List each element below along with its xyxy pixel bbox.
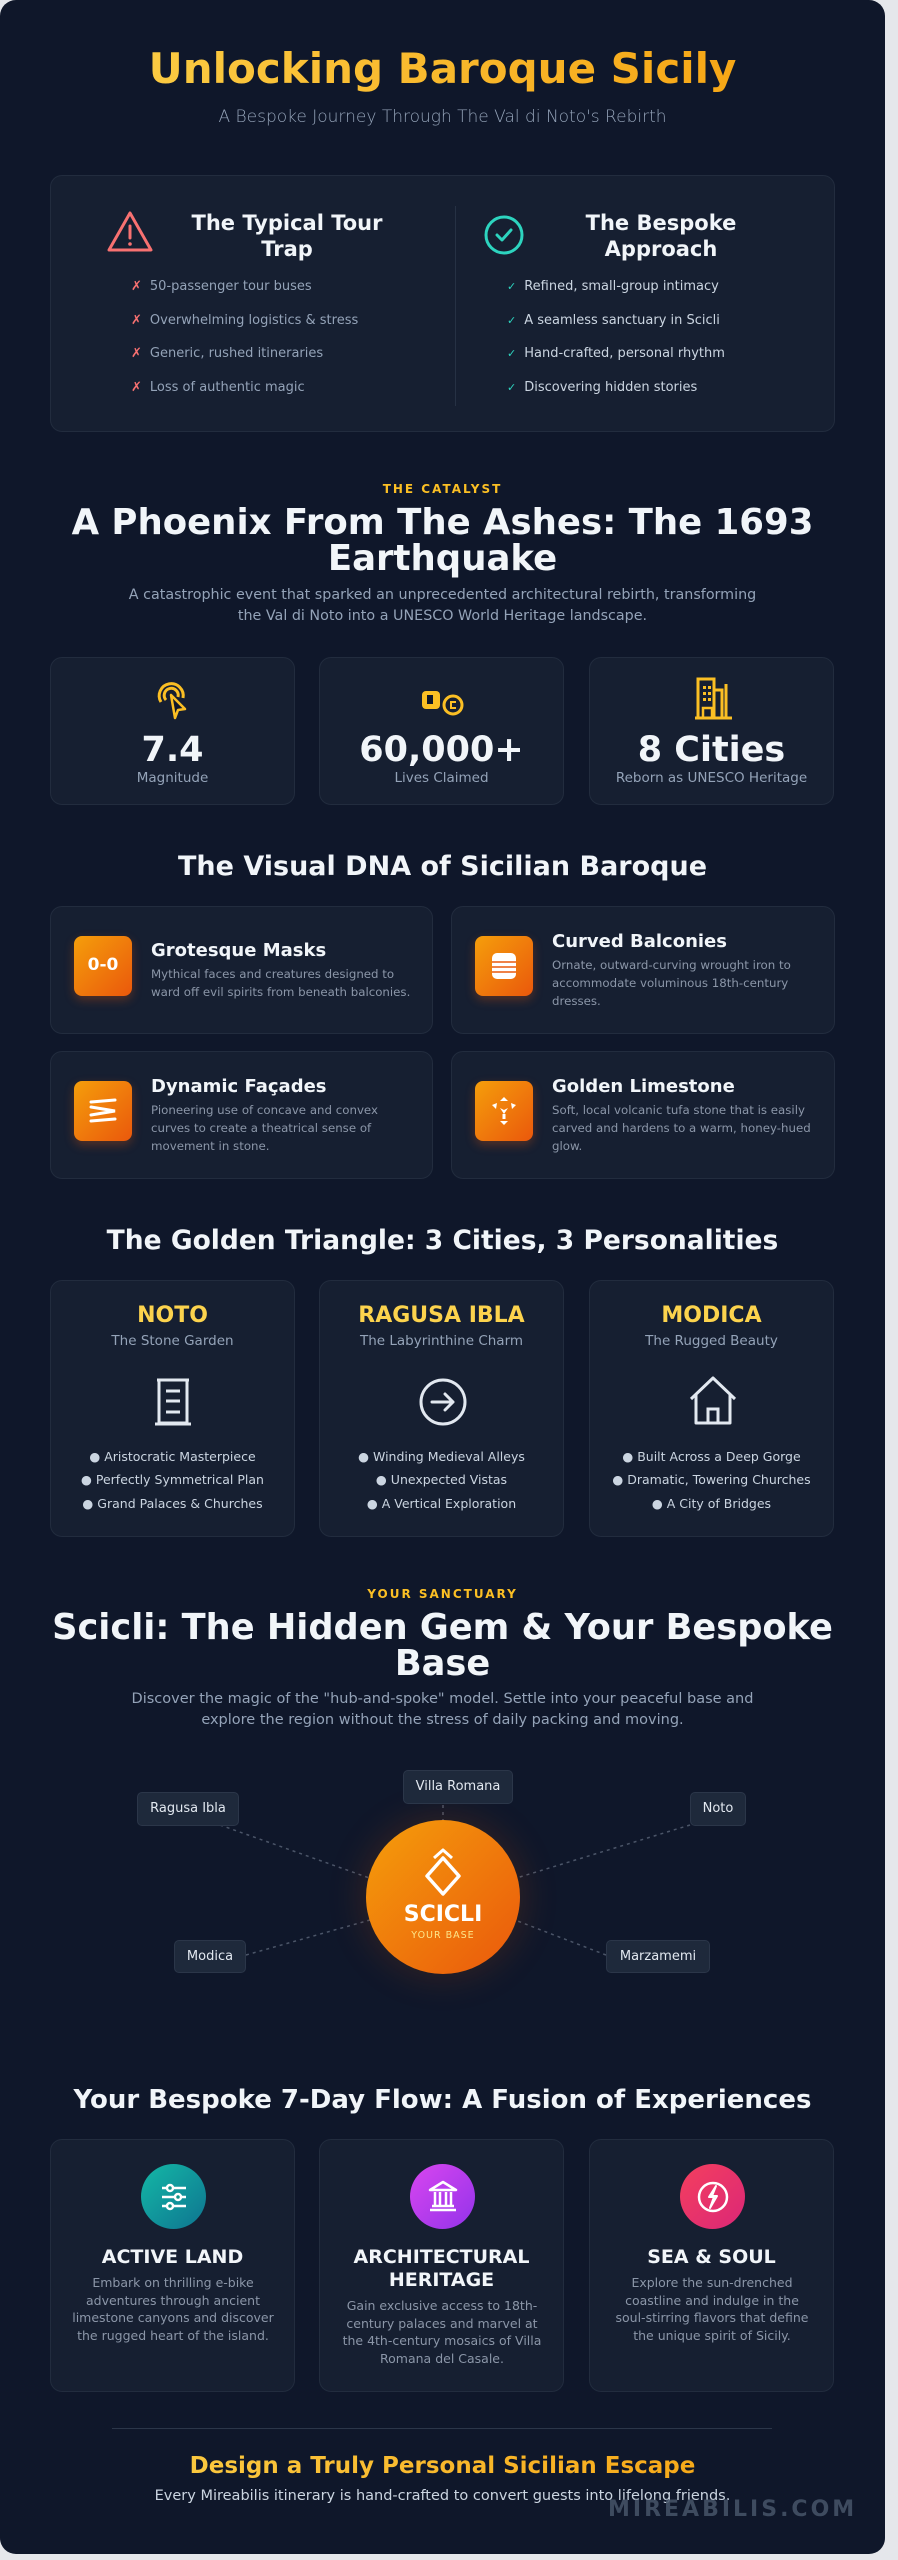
list: bespoke items: ✓ Discovering hidden stories — [507, 380, 697, 395]
number: 60,000+ — [359, 730, 524, 770]
heading: phoenix: A Phoenix From The Ashes: The 1693 — [72, 502, 813, 543]
list: bespoke items: ✓ Refined, small-group intimacy — [507, 279, 719, 294]
icon: compass — [680, 2164, 745, 2229]
list: ragusa bullets: ● A Vertical Exploration — [367, 1496, 516, 1511]
list: trap items — [131, 279, 358, 395]
heading: scicli: Scicli: The Hidden Gem & Your Bespoke — [52, 1607, 833, 1648]
list: trap items: ✗ Loss of authentic magic — [131, 380, 305, 395]
number: 8 Cities — [638, 730, 785, 770]
heading: 7-day flow: Your Bespoke 7-Day Flow: A Fusion of Experiences — [74, 2085, 811, 2115]
panel: noto: The Stone Garden — [111, 1333, 234, 1349]
panel: stat lives: Lives Claimed — [394, 770, 489, 786]
diagram: hub and spoke — [137, 1770, 746, 1988]
label: ragusa ibla — [137, 1792, 239, 1826]
list: trap items: ✗ Overwhelming logistics & stress — [131, 313, 358, 328]
icon: tap — [158, 682, 186, 720]
icon: house — [690, 1376, 736, 1424]
panel: modica — [589, 1280, 834, 1537]
panel: active land: ACTIVE LAND — [102, 2246, 243, 2268]
heading: golden triangle: The Golden Triangle: 3 Cities, 3 Personalities — [107, 1225, 778, 1256]
list: noto bullets: ● Aristocratic Masterpiece — [89, 1449, 256, 1464]
panel: golden limestone — [451, 1051, 835, 1179]
panel: modica: The Rugged Beauty — [645, 1333, 778, 1349]
icon: masks: 0-0 — [88, 955, 118, 975]
label: villa romana: Villa Romana — [416, 1779, 500, 1794]
panel: golden limestone: Soft, local volcanic tufa stone that is easily carved and hardens to a warm, honey-hued glow. — [552, 1103, 811, 1153]
panel: sea & soul — [589, 2139, 834, 2392]
panel: dynamic facades — [50, 1051, 433, 1179]
label: modica — [174, 1940, 246, 1973]
subtitle: A Bespoke Journey Through The Val di Noto's Rebirth — [218, 107, 667, 127]
list: noto bullets: ● Perfectly Symmetrical Plan — [81, 1472, 264, 1487]
panel: curved balconies: Curved Balconies — [552, 931, 727, 952]
list: trap items: ✗ 50-passenger tour buses — [131, 279, 312, 294]
list: bespoke items — [507, 279, 725, 395]
panel: curved balconies — [451, 906, 835, 1034]
list: modica bullets — [612, 1449, 811, 1511]
panel: noto: NOTO — [137, 1303, 208, 1328]
text: catalyst description — [128, 587, 756, 624]
title — [0, 43, 885, 95]
panel: active land: Embark on thrilling e-bike adventures through ancient limestone canyons and discover the rugged heart of the island. — [72, 2275, 274, 2343]
panel: stat lives — [319, 657, 564, 805]
list: modica bullets: ● Built Across a Deep Gorge — [622, 1449, 801, 1464]
label: modica: Modica — [187, 1949, 233, 1964]
list: ragusa bullets — [358, 1449, 525, 1511]
panel: comparison — [50, 175, 835, 432]
title: Unlocking Baroque Sicily — [149, 44, 736, 93]
icon: check — [484, 216, 524, 254]
label: marzamemi: Marzamemi — [620, 1949, 696, 1964]
icon: warning — [108, 211, 153, 252]
list: noto bullets — [81, 1449, 264, 1511]
panel: curved balconies: Ornate, outward-curving wrought iron to accommodate voluminous 18th-century dresses. — [552, 958, 791, 1008]
panel: sea & soul: SEA & SOUL — [647, 2246, 776, 2268]
heading: phoenix: Earthquake — [328, 538, 557, 579]
text: catalyst description: the Val di Noto into a UNESCO World Heritage landscape. — [238, 608, 647, 624]
hub circle: scicli — [366, 1820, 520, 1974]
panel: stat cities: Reborn as UNESCO Heritage — [616, 770, 807, 786]
panel: ragusa ibla — [319, 1280, 564, 1537]
panel: dynamic facades: Dynamic Façades — [151, 1076, 327, 1097]
list: ragusa bullets: ● Winding Medieval Alleys — [358, 1449, 525, 1464]
panel: architectural heritage: Gain exclusive access to 18th-century palaces and marvel at the 4th-century mosaics of Villa Romana del Casale. — [343, 2298, 541, 2366]
panel: ragusa ibla: The Labyrinthine Charm — [360, 1333, 523, 1349]
icon: coins — [422, 691, 464, 716]
panel: grotesque masks: Grotesque Masks — [151, 940, 326, 961]
kicker: the catalyst: THE CATALYST — [383, 482, 502, 496]
label: noto — [690, 1792, 746, 1826]
list: bespoke items: ✓ A seamless sanctuary in Scicli — [507, 313, 720, 328]
footer heading — [0, 2452, 885, 2480]
heading: scicli: Base — [395, 1643, 490, 1684]
icon: temple — [410, 2164, 475, 2229]
heading: phoenix — [72, 502, 813, 579]
text: catalyst description: A catastrophic event that sparked an unprecedented architectural rebirth, transforming — [129, 587, 756, 603]
text: scicli description — [132, 1691, 753, 1728]
heading: visual DNA: The Visual DNA of Sicilian Baroque — [178, 851, 707, 882]
icon: document building — [155, 1378, 191, 1426]
hub circle: scicli: SCICLI — [404, 1902, 482, 1927]
icon: waves — [74, 1081, 132, 1141]
list: modica bullets: ● Dramatic, Towering Churches — [612, 1472, 811, 1487]
heading: typical tour trap: The Typical Tour Trap — [192, 211, 382, 261]
panel: noto — [50, 1280, 295, 1537]
heading: scicli — [52, 1607, 833, 1684]
panel: architectural heritage: HERITAGE — [389, 2269, 494, 2291]
panel: stat magnitude — [50, 657, 295, 805]
heading: bespoke approach: The Bespoke Approach — [586, 211, 736, 261]
icon: buildings — [695, 678, 732, 720]
footer text: Every Mireabilis itinerary is hand-crafted to convert guests into lifelong friends. — [155, 2488, 730, 2504]
icon: stone — [475, 1081, 533, 1141]
list: noto bullets: ● Grand Palaces & Churches — [82, 1496, 263, 1511]
panel: sea & soul: Explore the sun-drenched coastline and indulge in the soul-stirring flavors that define the unique spirit of Sicily. — [616, 2275, 808, 2343]
panel: stat cities — [589, 657, 834, 805]
label: ragusa ibla: Ragusa Ibla — [150, 1801, 226, 1816]
number: 7.4 — [141, 730, 204, 770]
hub circle: scicli: YOUR BASE — [411, 1930, 475, 1941]
panel: grotesque masks — [50, 906, 433, 1034]
panel: grotesque masks: Mythical faces and creatures designed to ward off evil spirits from beneath balconies. — [151, 967, 410, 999]
panel: architectural heritage: ARCHITECTURAL — [354, 2246, 529, 2268]
panel: ragusa ibla: RAGUSA IBLA — [358, 1303, 525, 1328]
list: modica bullets: ● A City of Bridges — [652, 1496, 771, 1511]
label: villa romana — [403, 1770, 513, 1804]
panel: golden limestone: Golden Limestone — [552, 1076, 735, 1097]
list: ragusa bullets: ● Unexpected Vistas — [376, 1472, 507, 1487]
panel: architectural heritage — [319, 2139, 564, 2392]
icon: masks — [74, 936, 132, 996]
panel: dynamic facades: Pioneering use of concave and convex curves to create a theatrical sense of movement in stone. — [151, 1103, 378, 1153]
icon: arrow circle — [420, 1378, 466, 1426]
label: noto: Noto — [703, 1801, 733, 1816]
icon: balcony — [475, 936, 533, 996]
footer heading: Design a Truly Personal Sicilian Escape — [190, 2453, 695, 2479]
text: scicli description: explore the region without the stress of daily packing and moving. — [201, 1712, 684, 1728]
icon: sliders — [141, 2164, 206, 2229]
panel: active land — [50, 2139, 295, 2392]
panel: modica: MODICA — [661, 1303, 762, 1328]
kicker: your sanctuary: YOUR SANCTUARY — [367, 1587, 518, 1601]
label: marzamemi — [606, 1940, 710, 1973]
text: scicli description: Discover the magic of the "hub-and-spoke" model. Settle into your peaceful base and — [132, 1691, 753, 1707]
panel: stat magnitude: Magnitude — [137, 770, 208, 786]
list: bespoke items: ✓ Hand-crafted, personal rhythm — [507, 346, 725, 361]
list: trap items: ✗ Generic, rushed itineraries — [131, 346, 323, 361]
watermark: MIREABILIS.COM — [608, 2497, 857, 2522]
